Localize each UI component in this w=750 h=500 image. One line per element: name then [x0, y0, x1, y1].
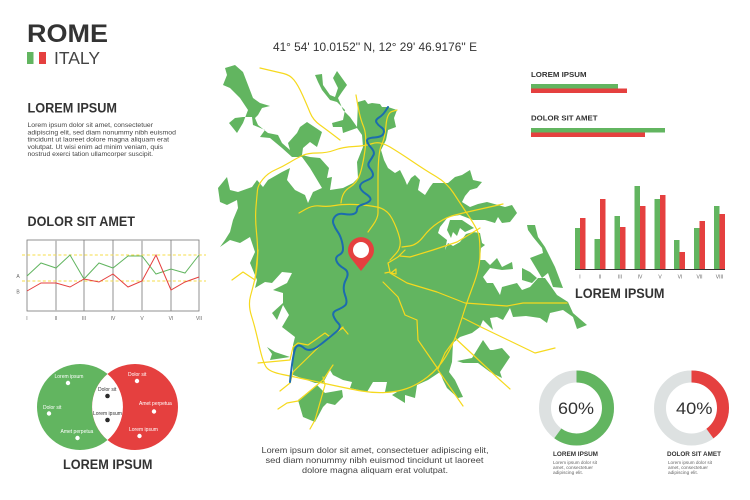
venn right circle: [92, 364, 178, 450]
heading: venn: LOREM IPSUM: [63, 457, 152, 472]
axis labels: III: [82, 316, 86, 322]
columns: red series: [580, 195, 725, 270]
column axis labels: II: [599, 274, 601, 280]
line: series A: [27, 255, 199, 279]
intro paragraph: [28, 123, 176, 158]
donut chart 60: [545, 376, 608, 440]
heading: intro: LOREM IPSUM: [28, 100, 117, 116]
panel: donut 40%: [660, 376, 723, 475]
panel: venn diagram: [37, 364, 178, 472]
caption paragraph: [262, 445, 488, 475]
donut label 40: amet, consectetuer: [668, 465, 708, 470]
subtitle: Italy: ITALY: [54, 48, 100, 68]
intro paragraph: Lorem ipsum dolor sit amet, consectetuer: [28, 123, 153, 129]
caption paragraph: dolore magna aliquam erat volutpat.: [302, 465, 448, 475]
column axis labels: VII: [696, 274, 703, 280]
column axis labels: [579, 274, 723, 280]
bar group: dolor sit amet: DOLOR SIT AMET: [531, 114, 598, 122]
venn centre labels: [93, 387, 122, 422]
intro paragraph: nostrud exerci tation ullamcorper suscipit.: [28, 152, 153, 158]
donut label 40: DOLOR SIT AMET: [667, 451, 721, 458]
caption paragraph: Lorem ipsum dolor sit amet, consectetuer adipiscing elit,: [262, 445, 488, 455]
donut label 60: Lorem ipsum dolor sit: [553, 460, 598, 465]
column axis labels: IV: [638, 274, 643, 280]
panel: line chart: [16, 214, 206, 322]
map: green territory: [218, 65, 587, 422]
venn right labels: [128, 372, 172, 438]
axis labels: V: [140, 316, 144, 322]
map: Tiber river: [290, 107, 388, 382]
column axis labels: VI: [678, 274, 682, 280]
icon: location pin: [348, 237, 374, 271]
panel: horizontal bars: [531, 70, 665, 137]
venn right labels: Amet perpetua: [139, 401, 172, 407]
caption paragraph: sed diam nonummy nibh euismod tincidunt ut laoreet: [266, 455, 484, 465]
donut chart 40: [660, 376, 723, 440]
venn left labels: [43, 374, 94, 440]
map of Rome: [218, 65, 587, 429]
axis labels: IV: [111, 316, 116, 322]
axis labels: II: [55, 316, 57, 322]
text block: intro: [28, 100, 176, 158]
donut label 40: adipiscing elit.: [668, 470, 698, 475]
donut label 40: Lorem ipsum dolor sit: [668, 460, 713, 465]
donut label 60: amet, consectetuer: [553, 465, 593, 470]
value 60: 60%: [558, 399, 594, 418]
intro paragraph: volutpat. Ut wisi enim ad minim veniam, quis: [28, 145, 163, 151]
venn left labels: Amet perpetua: [60, 429, 94, 435]
panel: column chart: [575, 186, 725, 301]
axis labels: I: [26, 316, 28, 322]
venn left labels: Lorem ipsum: [54, 374, 83, 380]
donut label 60: [553, 451, 598, 475]
bar group: lorem ipsum: LOREM IPSUM: [531, 70, 586, 79]
venn intersection: [92, 374, 123, 440]
value 40: 40%: [676, 399, 712, 418]
axis labels: [16, 274, 202, 322]
column axis labels: V: [658, 274, 662, 280]
venn right labels: Lorem ipsum: [129, 427, 158, 433]
heading: line chart: DOLOR SIT AMET: [28, 214, 136, 229]
intro paragraph: tincidunt ut laoreet dolore magna aliquam erat: [28, 138, 169, 144]
column axis labels: VIII: [716, 274, 723, 280]
icon: Italian flag: [27, 52, 46, 64]
donut label 60: LOREM IPSUM: [553, 451, 598, 458]
intro paragraph: adipiscing elit, sed diam nonummy nibh euismod: [28, 130, 176, 136]
columns: green series: [575, 186, 720, 270]
title block: [27, 20, 108, 68]
venn right labels: Dolor sit: [128, 372, 147, 378]
title: Rome: ROME: [27, 20, 108, 48]
column axis labels: III: [618, 274, 622, 280]
venn centre labels: Dolor sit: [98, 387, 117, 393]
venn left circle: [37, 364, 123, 450]
axis labels: B: [16, 290, 20, 296]
map: yellow roads: [232, 68, 567, 429]
panel: donut 60%: [545, 376, 608, 475]
donut label 60: adipiscing elit.: [553, 470, 583, 475]
donut label 40: [667, 451, 721, 475]
coordinates: 41° 54' 10.0152'' N, 12° 29' 46.9176'' E: [273, 42, 477, 54]
axis labels: VI: [169, 316, 173, 322]
axis labels: A: [16, 274, 20, 280]
line: series B: [27, 255, 199, 291]
venn left labels: Dolor sit: [43, 405, 62, 411]
column axis labels: I: [579, 274, 581, 280]
axis labels: VII: [196, 316, 202, 322]
venn centre labels: Lorem ipsum: [93, 411, 122, 417]
heading: column chart: LOREM IPSUM: [575, 286, 664, 301]
